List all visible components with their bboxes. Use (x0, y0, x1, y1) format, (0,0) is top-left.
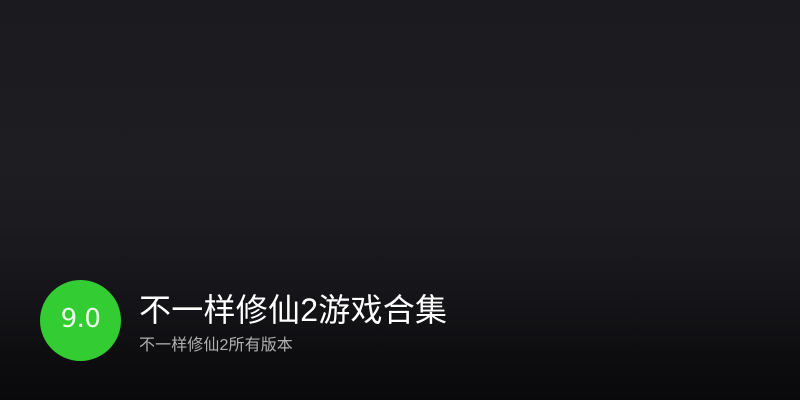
title: 不一样修仙2游戏合集 (139, 292, 447, 328)
subtitle: 不一样修仙2所有版本 (139, 337, 293, 354)
score badge (40, 280, 121, 361)
score badge: 9.0 (61, 304, 100, 334)
